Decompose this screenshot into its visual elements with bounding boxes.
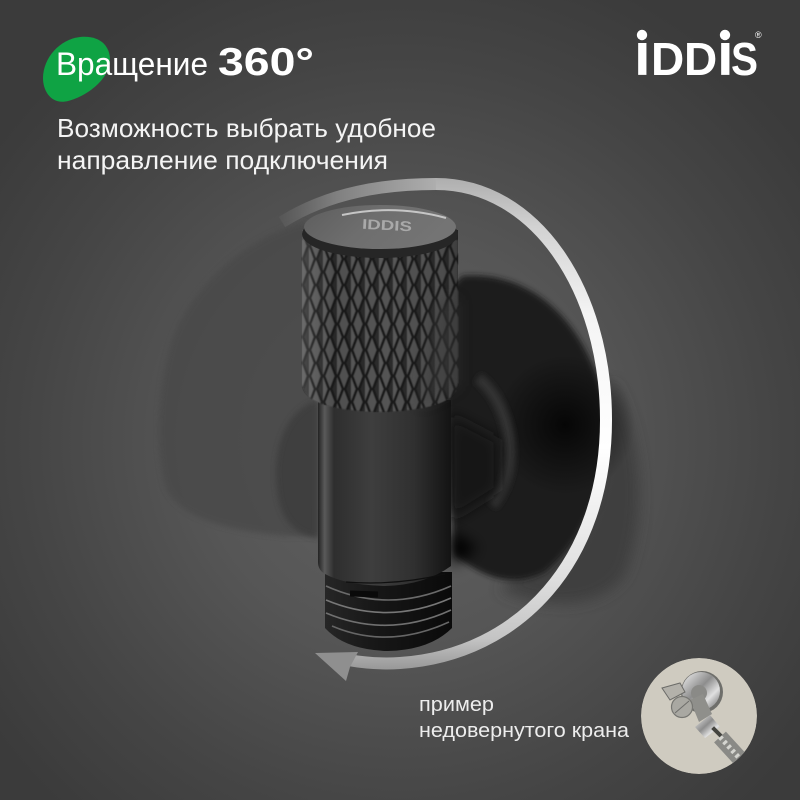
subtitle: направление подключения: [57, 145, 388, 175]
green blob accent: [43, 37, 110, 102]
title: 360°: [218, 41, 314, 84]
compression nut: [695, 715, 720, 738]
logo: iddis: i: [634, 21, 651, 88]
valve knob: [672, 696, 692, 718]
caption: недовернутого крана: [419, 720, 630, 742]
subtitle: Возможность выбрать удобное: [57, 113, 436, 143]
wall escutcheon: [681, 671, 723, 713]
logo: iddis: ®: [755, 30, 762, 40]
logo: iddis: D: [651, 33, 684, 85]
braided hose: [714, 732, 744, 763]
title: Вращение: [56, 46, 208, 82]
knob top face with logo: [302, 205, 458, 258]
logo: iddis: D: [684, 33, 717, 85]
caption: пример: [419, 694, 494, 716]
lever handle: [662, 683, 685, 700]
motion blur: right dark ghost of valve: [440, 276, 650, 604]
motion blur: left ghost of valve: [159, 222, 318, 538]
knob top face with logo: IDDIS: [362, 216, 412, 234]
threaded end: [325, 572, 452, 651]
inset photo: under-tightened valve: [641, 658, 757, 774]
cylindrical body: [318, 400, 451, 586]
logo: iddis: [636, 30, 762, 76]
logo: iddis: i: [717, 21, 734, 88]
valve: [302, 205, 458, 651]
rotation arrow: ring with arrowhead: [282, 184, 606, 681]
valve connector: [691, 698, 712, 722]
logo: iddis: S: [731, 33, 758, 85]
knurled knob: [302, 230, 458, 412]
